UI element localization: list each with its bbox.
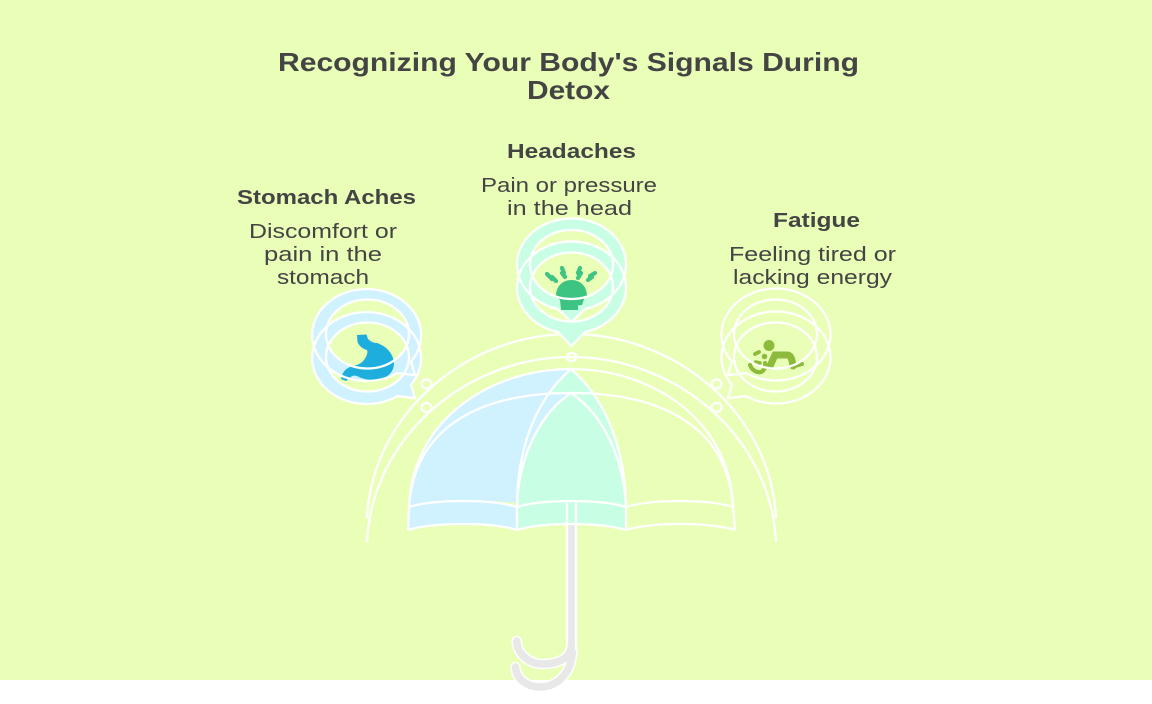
description: stomach aches: stomach <box>277 267 369 289</box>
canopy panel: headaches <box>517 369 626 530</box>
ring outlines <box>517 218 626 346</box>
title: Detox <box>527 75 611 105</box>
callout: stomach aches <box>237 187 421 404</box>
heading: stomach aches: Stomach Aches <box>237 187 416 209</box>
canopy outlines <box>408 369 735 530</box>
stomach ring fills <box>312 289 421 404</box>
description: headaches: Pain or pressure <box>481 175 657 197</box>
description: headaches: in the head <box>507 198 632 220</box>
icon: head with lightning bolts <box>547 268 595 310</box>
head ring fills <box>517 218 626 346</box>
description: stomach aches: Discomfort or <box>249 221 397 243</box>
title <box>278 47 859 105</box>
icon: stomach <box>341 334 394 381</box>
canopy panel: stomach aches <box>408 369 571 530</box>
umbrella shaft <box>567 501 576 650</box>
umbrella handle <box>516 523 572 687</box>
description: stomach aches: pain in the <box>264 244 382 266</box>
callout: headaches <box>481 141 657 346</box>
description: stomach aches <box>249 221 397 289</box>
icon: tired person <box>750 340 802 372</box>
ring outlines <box>721 288 830 403</box>
outer arcs <box>367 332 776 542</box>
canopy cap <box>547 369 596 396</box>
description: headaches <box>481 175 657 220</box>
description: fatigue: lacking energy <box>733 267 892 289</box>
heading: headaches: Headaches <box>507 141 636 163</box>
ring outlines <box>312 289 421 404</box>
umbrella canopy <box>408 369 735 650</box>
heading: fatigue: Fatigue <box>773 210 860 232</box>
title: Recognizing Your Body's Signals During <box>278 47 859 77</box>
callout: fatigue <box>721 210 896 403</box>
description: fatigue: Feeling tired or <box>729 244 896 266</box>
description: fatigue <box>729 244 896 289</box>
